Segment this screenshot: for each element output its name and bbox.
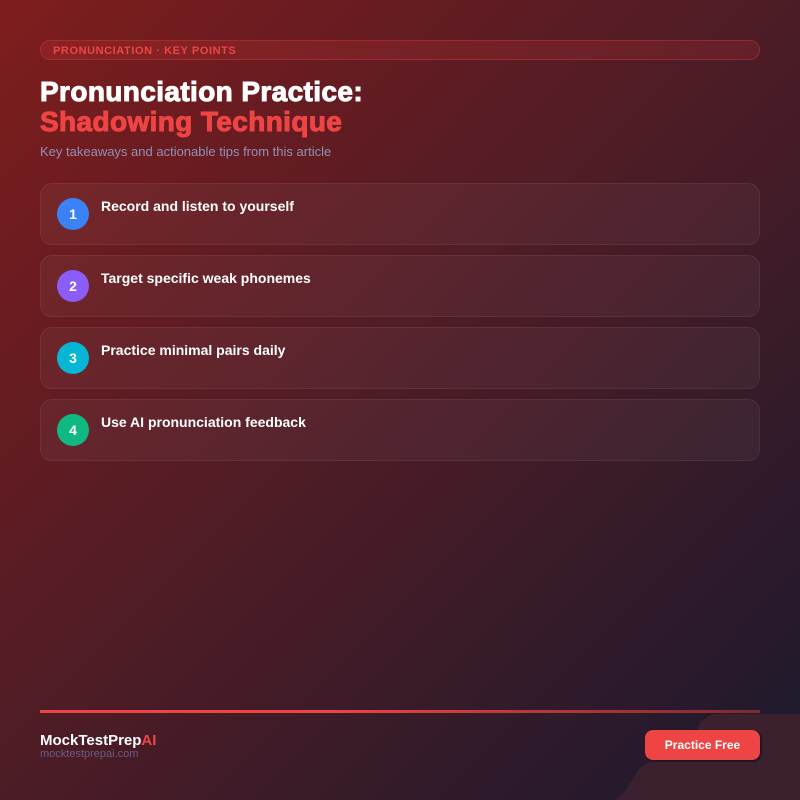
- card 3: [40, 327, 760, 389]
- title: Shadowing Technique: [40, 106, 342, 137]
- card 1: [40, 183, 760, 245]
- call to action button: [645, 730, 760, 760]
- brand url: mocktestprepai.com: [40, 748, 138, 760]
- card 4 text: Use AI pronunciation feedback: [101, 414, 306, 430]
- card 2 text: Target specific weak phonemes: [101, 270, 311, 286]
- number badge 4: [57, 414, 89, 446]
- number badge 3: [57, 342, 89, 374]
- number badge 4: 4: [69, 422, 77, 438]
- number badge 2: 2: [69, 278, 77, 294]
- badge text: PRONUNCIATION · KEY POINTS: [53, 45, 236, 57]
- card 4: [40, 399, 760, 461]
- number badge 1: 1: [69, 206, 77, 222]
- card 3 text: Practice minimal pairs daily: [101, 342, 285, 358]
- footer accent line: [40, 710, 760, 713]
- category badge: [40, 40, 760, 60]
- call to action button: Practice Free: [665, 738, 740, 752]
- number badge 3: 3: [69, 350, 77, 366]
- card 1 text: Record and listen to yourself: [101, 198, 294, 214]
- brand name: MockTestPrepAI: [40, 732, 156, 749]
- number badge 1: [57, 198, 89, 230]
- title: [40, 76, 363, 138]
- number badge 2: [57, 270, 89, 302]
- card 2: [40, 255, 760, 317]
- title: Pronunciation Practice:: [40, 76, 363, 107]
- subtitle: Key takeaways and actionable tips from this article: [40, 144, 331, 159]
